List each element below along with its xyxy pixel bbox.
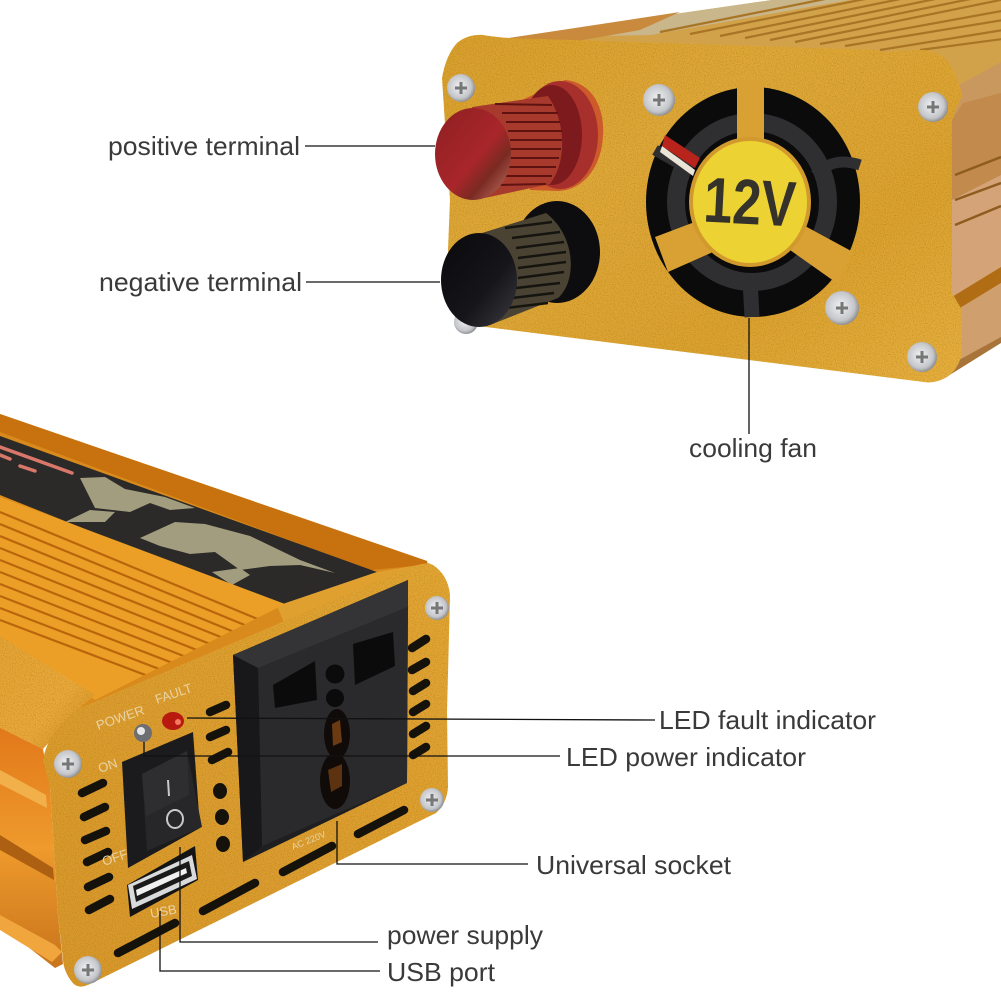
top face with cooling ribs <box>509 0 1001 85</box>
screws, AC plate <box>54 596 449 984</box>
callout: cooling fan: cooling fan <box>689 433 817 463</box>
rocker switch <box>122 732 202 868</box>
cooling fan grille with 12V hub <box>646 80 860 317</box>
gold band beyond the label panel <box>277 563 430 625</box>
panel silkscreen: ON <box>96 755 119 776</box>
LED indicators <box>134 712 184 742</box>
gold spokes <box>737 80 764 150</box>
callout: power supply <box>180 847 543 950</box>
callout: LED fault indicator: LED fault indicator <box>659 705 876 735</box>
fan rotor detail <box>655 122 860 317</box>
voltage label: 12V <box>702 164 798 240</box>
panel silkscreen <box>94 680 327 921</box>
side face with grooves <box>945 62 1001 378</box>
red positive terminal <box>435 80 603 200</box>
callout: Universal socket: Universal socket <box>536 850 732 880</box>
callout: power supply: power supply <box>387 920 543 950</box>
panel silkscreen: OFF <box>100 846 130 869</box>
orange side face <box>0 728 63 968</box>
world map label panel <box>0 436 377 606</box>
faded red lettering on panel <box>0 447 72 473</box>
callout: USB port: USB port <box>387 957 496 987</box>
panel silkscreen: POWER <box>94 702 146 733</box>
top case edge <box>0 414 440 740</box>
black negative terminal <box>441 201 600 327</box>
USB port <box>127 846 198 917</box>
map continents <box>65 477 335 585</box>
rounded gold shoulder <box>0 636 95 749</box>
panel silkscreen: FAULT <box>153 680 194 707</box>
panel silkscreen: AC 220V <box>290 829 327 852</box>
ventilation slots <box>82 639 426 953</box>
callout: negative terminal: negative terminal <box>99 267 302 297</box>
callout: USB port <box>160 911 496 987</box>
front plate <box>442 35 962 382</box>
callout: LED power indicator: LED power indicator <box>566 742 806 772</box>
front plate <box>43 564 450 987</box>
cooling ribs <box>0 497 284 700</box>
screws, 12V plate <box>447 74 948 372</box>
universal socket <box>233 580 408 862</box>
callout: LED power indicator <box>144 742 806 772</box>
product photo: 12V input end of inverter <box>435 0 1001 382</box>
callout: Universal socket <box>337 821 732 880</box>
product photo: AC output end of inverter <box>0 414 450 987</box>
callout: positive terminal: positive terminal <box>108 131 300 161</box>
panel silkscreen: USB <box>149 902 178 921</box>
